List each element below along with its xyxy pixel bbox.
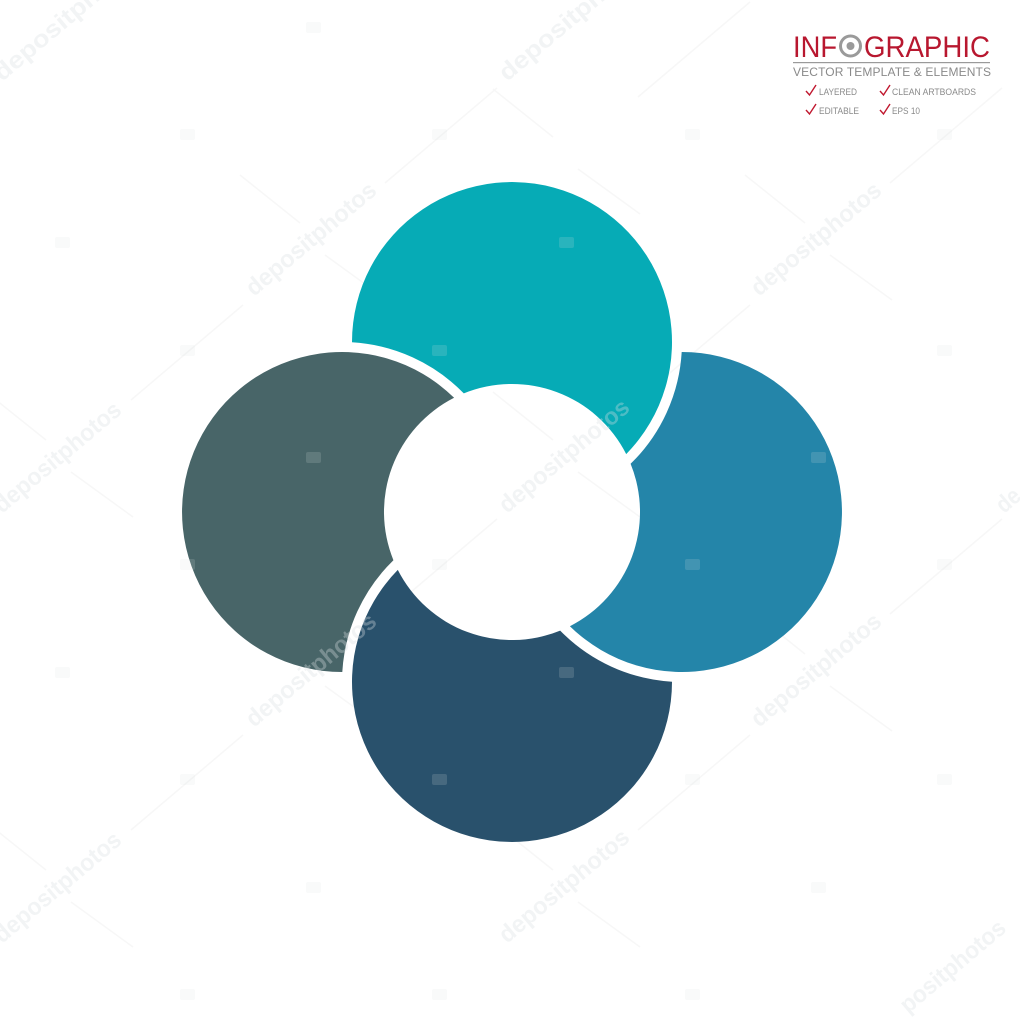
segment: teal top circle [352,182,672,454]
watermark text: depositphotos [746,608,887,733]
feature list: CLEAN ARTBOARDS [892,87,976,98]
logo subtitle: VECTOR TEMPLATE & ELEMENTS [793,65,991,79]
segment: navy bottom circle [352,570,672,842]
segment: slate left circle [182,352,454,672]
feature list: EPS 10 [892,106,920,117]
watermark text: positphotos [895,914,1011,1019]
watermark text: depositphotos [494,394,635,519]
logo title: GRAPHIC [864,31,990,64]
logo block [793,31,991,117]
watermark text: depositphotos [746,177,887,302]
feature list: EDITABLE [819,106,859,117]
feature list: LAYERED [819,87,857,98]
feature list [806,85,976,117]
infographic: four interlocking circles [182,182,842,842]
logo title: INF [793,31,837,64]
watermark text: depositphotos [241,177,382,302]
segment: blue right circle [570,352,842,672]
logo rule [793,62,990,63]
watermark text: depositphotos [241,608,382,733]
logo title [793,31,990,64]
watermark text: depositphotos [494,824,635,949]
